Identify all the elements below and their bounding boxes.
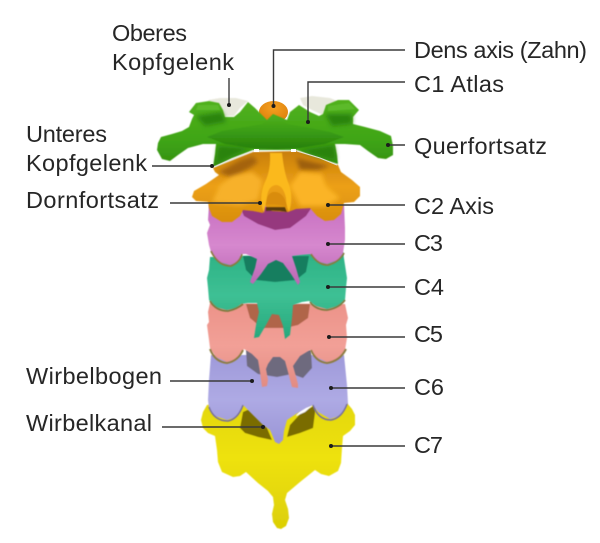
leader: C6 [331,387,405,389]
right gap [291,149,296,152]
C7 canal gap left [248,405,264,416]
label: C2 Axis: C2 Axis [414,193,494,219]
C2 notch dark [266,207,287,212]
vertebra C7 [201,400,355,529]
left joint line [214,151,253,167]
C2 body [192,151,360,222]
C1 left shadow [196,112,226,126]
C7 canal gap right [296,405,313,416]
leader: Dens axis [274,50,405,106]
label: Wirbelkanal: Wirbelkanal [26,410,152,436]
left articular surface [208,98,248,116]
leader: Oberes Kopfgelenk [228,78,230,105]
leader: C7 [331,445,405,447]
leader: Dornfortsatz [170,202,260,204]
vertebra C3 [207,205,345,285]
label: Oberes Kopfgelenk: Oberes [112,20,187,46]
label: C6: C6 [414,374,444,400]
C6 underside rim [209,404,347,421]
vertebra C6 [208,350,348,444]
leader: Querfortsatz [388,144,405,146]
C1 lower shadow left [216,146,250,164]
label: Dens axis (Zahn): Dens axis (Zahn) [414,37,587,63]
C4 underside rim [210,300,345,311]
C1 lower shadow right [300,145,336,160]
C2 right arch highlight [290,172,340,206]
C1 central arch [207,115,344,149]
label: Unteres Kopfgelenk: Unteres [26,121,107,147]
C7 body [201,400,355,529]
C5 body [207,303,348,388]
label: C5: C5 [414,321,443,347]
vertebra C5 [207,303,348,388]
label: Oberes Kopfgelenk: Kopfgelenk [112,49,234,75]
C2 shaded hollow left [218,156,258,178]
label: C7: C7 [414,432,443,458]
C1 inferior joint lines [214,149,337,167]
C5 upper canal [246,304,310,328]
C5 underside rim [210,349,346,363]
C3 upper shadow [240,207,312,230]
label: C3: C3 [414,230,443,256]
label: C4: C4 [414,274,444,300]
C1 facet highlight right [328,103,355,111]
leader: Wirbelbogen [170,380,252,382]
C2 spinous ridge [261,153,291,213]
leader: Wirbelkanal [162,426,263,428]
label: Querfortsatz: Querfortsatz [414,133,547,159]
C4 body [207,252,347,339]
right articular surface [300,96,340,115]
leader end dots [210,103,390,448]
label: Dornfortsatz: Dornfortsatz [26,187,159,213]
C7 canal shadow left [240,408,272,440]
labels left [26,20,234,436]
C3 body [207,205,345,285]
C2 shaded hollow right [296,158,330,170]
C1 top facet highlight [196,105,220,110]
leader: C4 [328,286,405,288]
vertebra C2 Axis [192,151,360,222]
C2 notch [264,192,287,207]
dens axis [259,101,288,123]
label: C1 Atlas: C1 Atlas [414,71,504,97]
leader: C3 [328,243,405,245]
leader lines [152,50,405,446]
leader: C5 [329,336,405,338]
vertebra C1 Atlas [157,100,393,167]
C4 upper canal [243,256,309,282]
right joint line [297,151,337,165]
C1 right shadow [325,114,352,126]
leader: C2 Axis [328,204,405,206]
C2 left arch highlight [212,172,262,205]
C1 body [157,100,393,167]
C6 canal shadow [246,350,312,378]
label: Unteres Kopfgelenk: Kopfgelenk [26,150,147,176]
white articular surfaces [208,96,340,116]
leader: Unteres Kopfgelenk [152,165,212,167]
vertebra C4 [207,252,347,339]
left gap [254,149,259,152]
C7 canal shadow right [287,405,316,437]
labels right [414,37,587,458]
C6 body [208,355,348,444]
C3 underside rim [211,251,344,266]
label: Wirbelbogen: Wirbelbogen [26,363,162,389]
leader: C1 Atlas [308,82,405,122]
